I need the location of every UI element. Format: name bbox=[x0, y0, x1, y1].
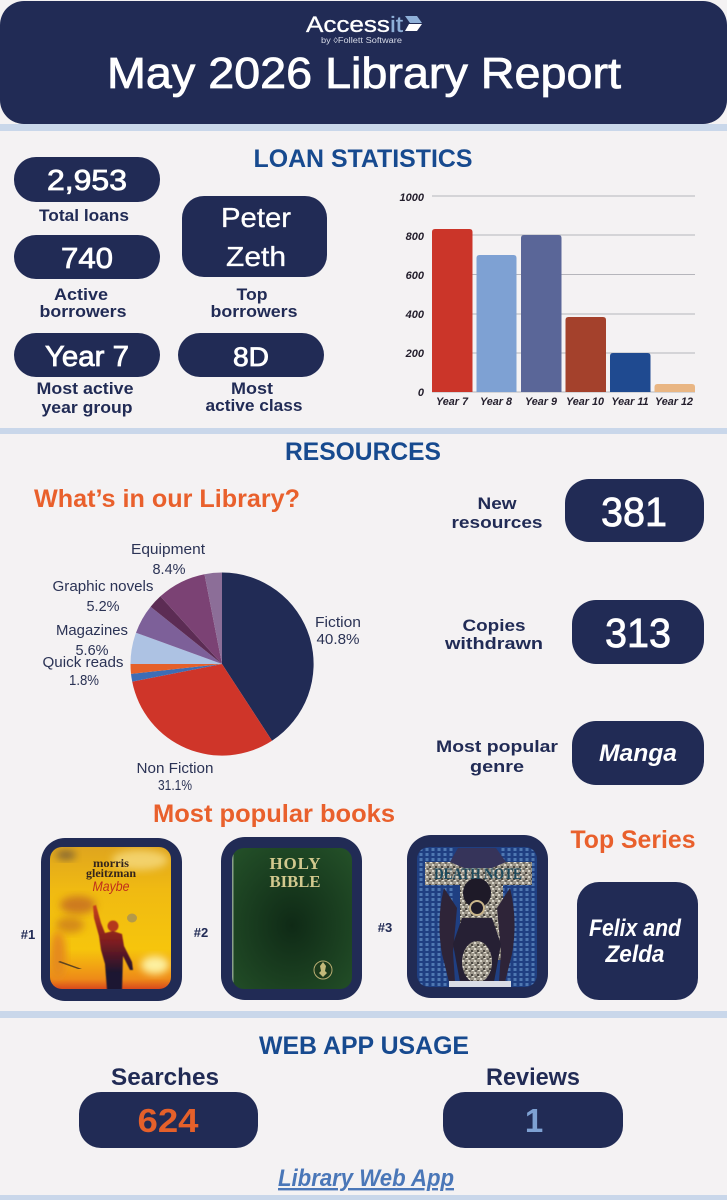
stat: most active year group: Most active bbox=[36, 379, 134, 398]
stat: new resources: resources bbox=[452, 513, 542, 532]
book cover 2: Holy Bible: BIBLE bbox=[270, 872, 320, 891]
link: library web app: Library Web App bbox=[278, 1165, 454, 1192]
book cover 1: Maybe: Maybe bbox=[92, 878, 130, 894]
stat: copies withdrawn: withdrawn bbox=[444, 634, 543, 653]
pie chart: library composition: 31.1% bbox=[158, 778, 192, 794]
stat: copies withdrawn bbox=[444, 600, 704, 664]
stat: most active year group: year group bbox=[42, 398, 132, 417]
book cover 1: Maybe bbox=[41, 838, 182, 1001]
logo: Accessit by Follett Software: by ◊Follett Software bbox=[321, 36, 403, 45]
rank #2: #2 bbox=[194, 925, 208, 940]
stat: total loans bbox=[14, 157, 160, 225]
stat: reviews bbox=[443, 1064, 623, 1148]
pie chart: library composition: Non Fiction bbox=[136, 761, 214, 777]
stat: active borrowers: Active bbox=[54, 285, 108, 304]
card: top series Felix and Zelda: Felix and bbox=[589, 915, 682, 942]
stat: top borrowers bbox=[182, 196, 327, 321]
stat: top borrowers: Top bbox=[236, 285, 268, 304]
bar chart: loans by year group: Year 11 bbox=[611, 396, 649, 408]
stat: searches: 624 bbox=[138, 1102, 199, 1139]
stat: most popular genre: Most popular bbox=[436, 737, 558, 756]
pie chart: library composition: Magazines bbox=[56, 623, 128, 639]
book cover 1: Maybe: gleitzman bbox=[86, 866, 136, 880]
stat: most active class: Most bbox=[231, 379, 273, 398]
heading: loan statistics: LOAN STATISTICS bbox=[254, 145, 472, 173]
bar chart: loans by year group: 1000 bbox=[400, 192, 425, 204]
pie chart: library composition: Quick reads bbox=[42, 655, 124, 671]
stat: most popular genre: genre bbox=[470, 757, 524, 776]
bar chart: loans by year group bbox=[400, 192, 695, 408]
bar chart: loans by year group: Year 9 bbox=[525, 396, 557, 408]
stat: most active class: 8D bbox=[233, 342, 269, 372]
stat: most popular genre bbox=[436, 721, 704, 785]
pie chart: library composition: 5.2% bbox=[86, 599, 120, 615]
book cover 3: Death Note bbox=[407, 835, 548, 998]
stat: searches bbox=[79, 1064, 258, 1148]
bar chart: loans by year group: 800 bbox=[406, 231, 425, 243]
pie chart: library composition: Fiction bbox=[315, 615, 361, 631]
bar chart: loans by year group: Year 8 bbox=[480, 396, 512, 408]
bar chart: loans by year group: 400 bbox=[405, 309, 425, 321]
stat: reviews: 1 bbox=[525, 1102, 543, 1139]
stat: active borrowers: borrowers bbox=[40, 302, 126, 321]
stat: top borrowers: Peter bbox=[221, 202, 291, 233]
logo: Accessit by Follett Software bbox=[306, 12, 422, 45]
book cover 2: Holy Bible: HOLY bbox=[270, 854, 320, 873]
stat: active borrowers: 740 bbox=[61, 243, 113, 275]
bar chart: loans by year group: 200 bbox=[405, 348, 425, 360]
rank #3: #3 bbox=[378, 920, 392, 935]
card: top series Felix and Zelda bbox=[577, 882, 698, 1000]
bar chart: loans by year group: 600 bbox=[406, 270, 425, 282]
pie chart: library composition: 40.8% bbox=[316, 632, 360, 648]
stat: most active class bbox=[178, 333, 324, 415]
logo: Accessit by Follett Software: Access it bbox=[306, 12, 403, 37]
stat: new resources: 381 bbox=[601, 489, 667, 535]
stat: most popular genre: Manga bbox=[599, 740, 677, 767]
subheading: top series: Top Series bbox=[570, 826, 696, 854]
pie chart: library composition: 5.6% bbox=[76, 643, 109, 659]
bar chart: loans by year group: Year 10 bbox=[566, 396, 604, 408]
stat: reviews: Reviews bbox=[486, 1064, 580, 1091]
stat: top borrowers: borrowers bbox=[210, 302, 298, 321]
heading: web app usage: WEB APP USAGE bbox=[259, 1032, 469, 1060]
stat: active borrowers bbox=[14, 235, 160, 321]
card: top series Felix and Zelda: Zelda bbox=[605, 941, 664, 968]
pie chart: library composition bbox=[42, 542, 361, 794]
stat: copies withdrawn: Copies bbox=[462, 616, 526, 635]
book cover 3: Death Note: DEATH NOTE bbox=[434, 866, 522, 883]
heading: resources: RESOURCES bbox=[285, 438, 441, 466]
stat: new resources: New bbox=[478, 494, 517, 513]
header banner bbox=[0, 1, 727, 124]
book cover 1: Maybe: morris bbox=[93, 856, 129, 870]
book cover 2: Holy Bible bbox=[221, 837, 362, 1000]
bar chart: loans by year group: Year 7 bbox=[436, 396, 469, 408]
stat: total loans: Total loans bbox=[39, 206, 129, 225]
stat: most active class: active class bbox=[206, 396, 302, 415]
pie chart: library composition: Equipment bbox=[131, 542, 205, 558]
pie chart: library composition: 1.8% bbox=[69, 673, 99, 689]
bar chart: loans by year group: Year 12 bbox=[655, 396, 693, 408]
subheading: most popular books: Most popular books bbox=[153, 800, 395, 828]
stat: most active year group bbox=[14, 333, 160, 417]
rank #1: #1 bbox=[21, 927, 35, 942]
title: May 2026 Library Report bbox=[107, 49, 621, 98]
pie chart: library composition: 8.4% bbox=[152, 562, 186, 578]
stat: searches: Searches bbox=[111, 1064, 219, 1091]
pie chart: library composition: Graphic novels bbox=[52, 579, 154, 595]
stat: total loans: 2,953 bbox=[47, 165, 127, 197]
bar chart: loans by year group: 0 bbox=[418, 387, 425, 399]
stat: new resources bbox=[452, 479, 704, 542]
stat: top borrowers: Zeth bbox=[226, 241, 286, 272]
stat: copies withdrawn: 313 bbox=[605, 610, 671, 656]
subheading: what's in our library: What’s in our Library? bbox=[34, 485, 300, 513]
stat: most active year group: Year 7 bbox=[45, 341, 129, 373]
